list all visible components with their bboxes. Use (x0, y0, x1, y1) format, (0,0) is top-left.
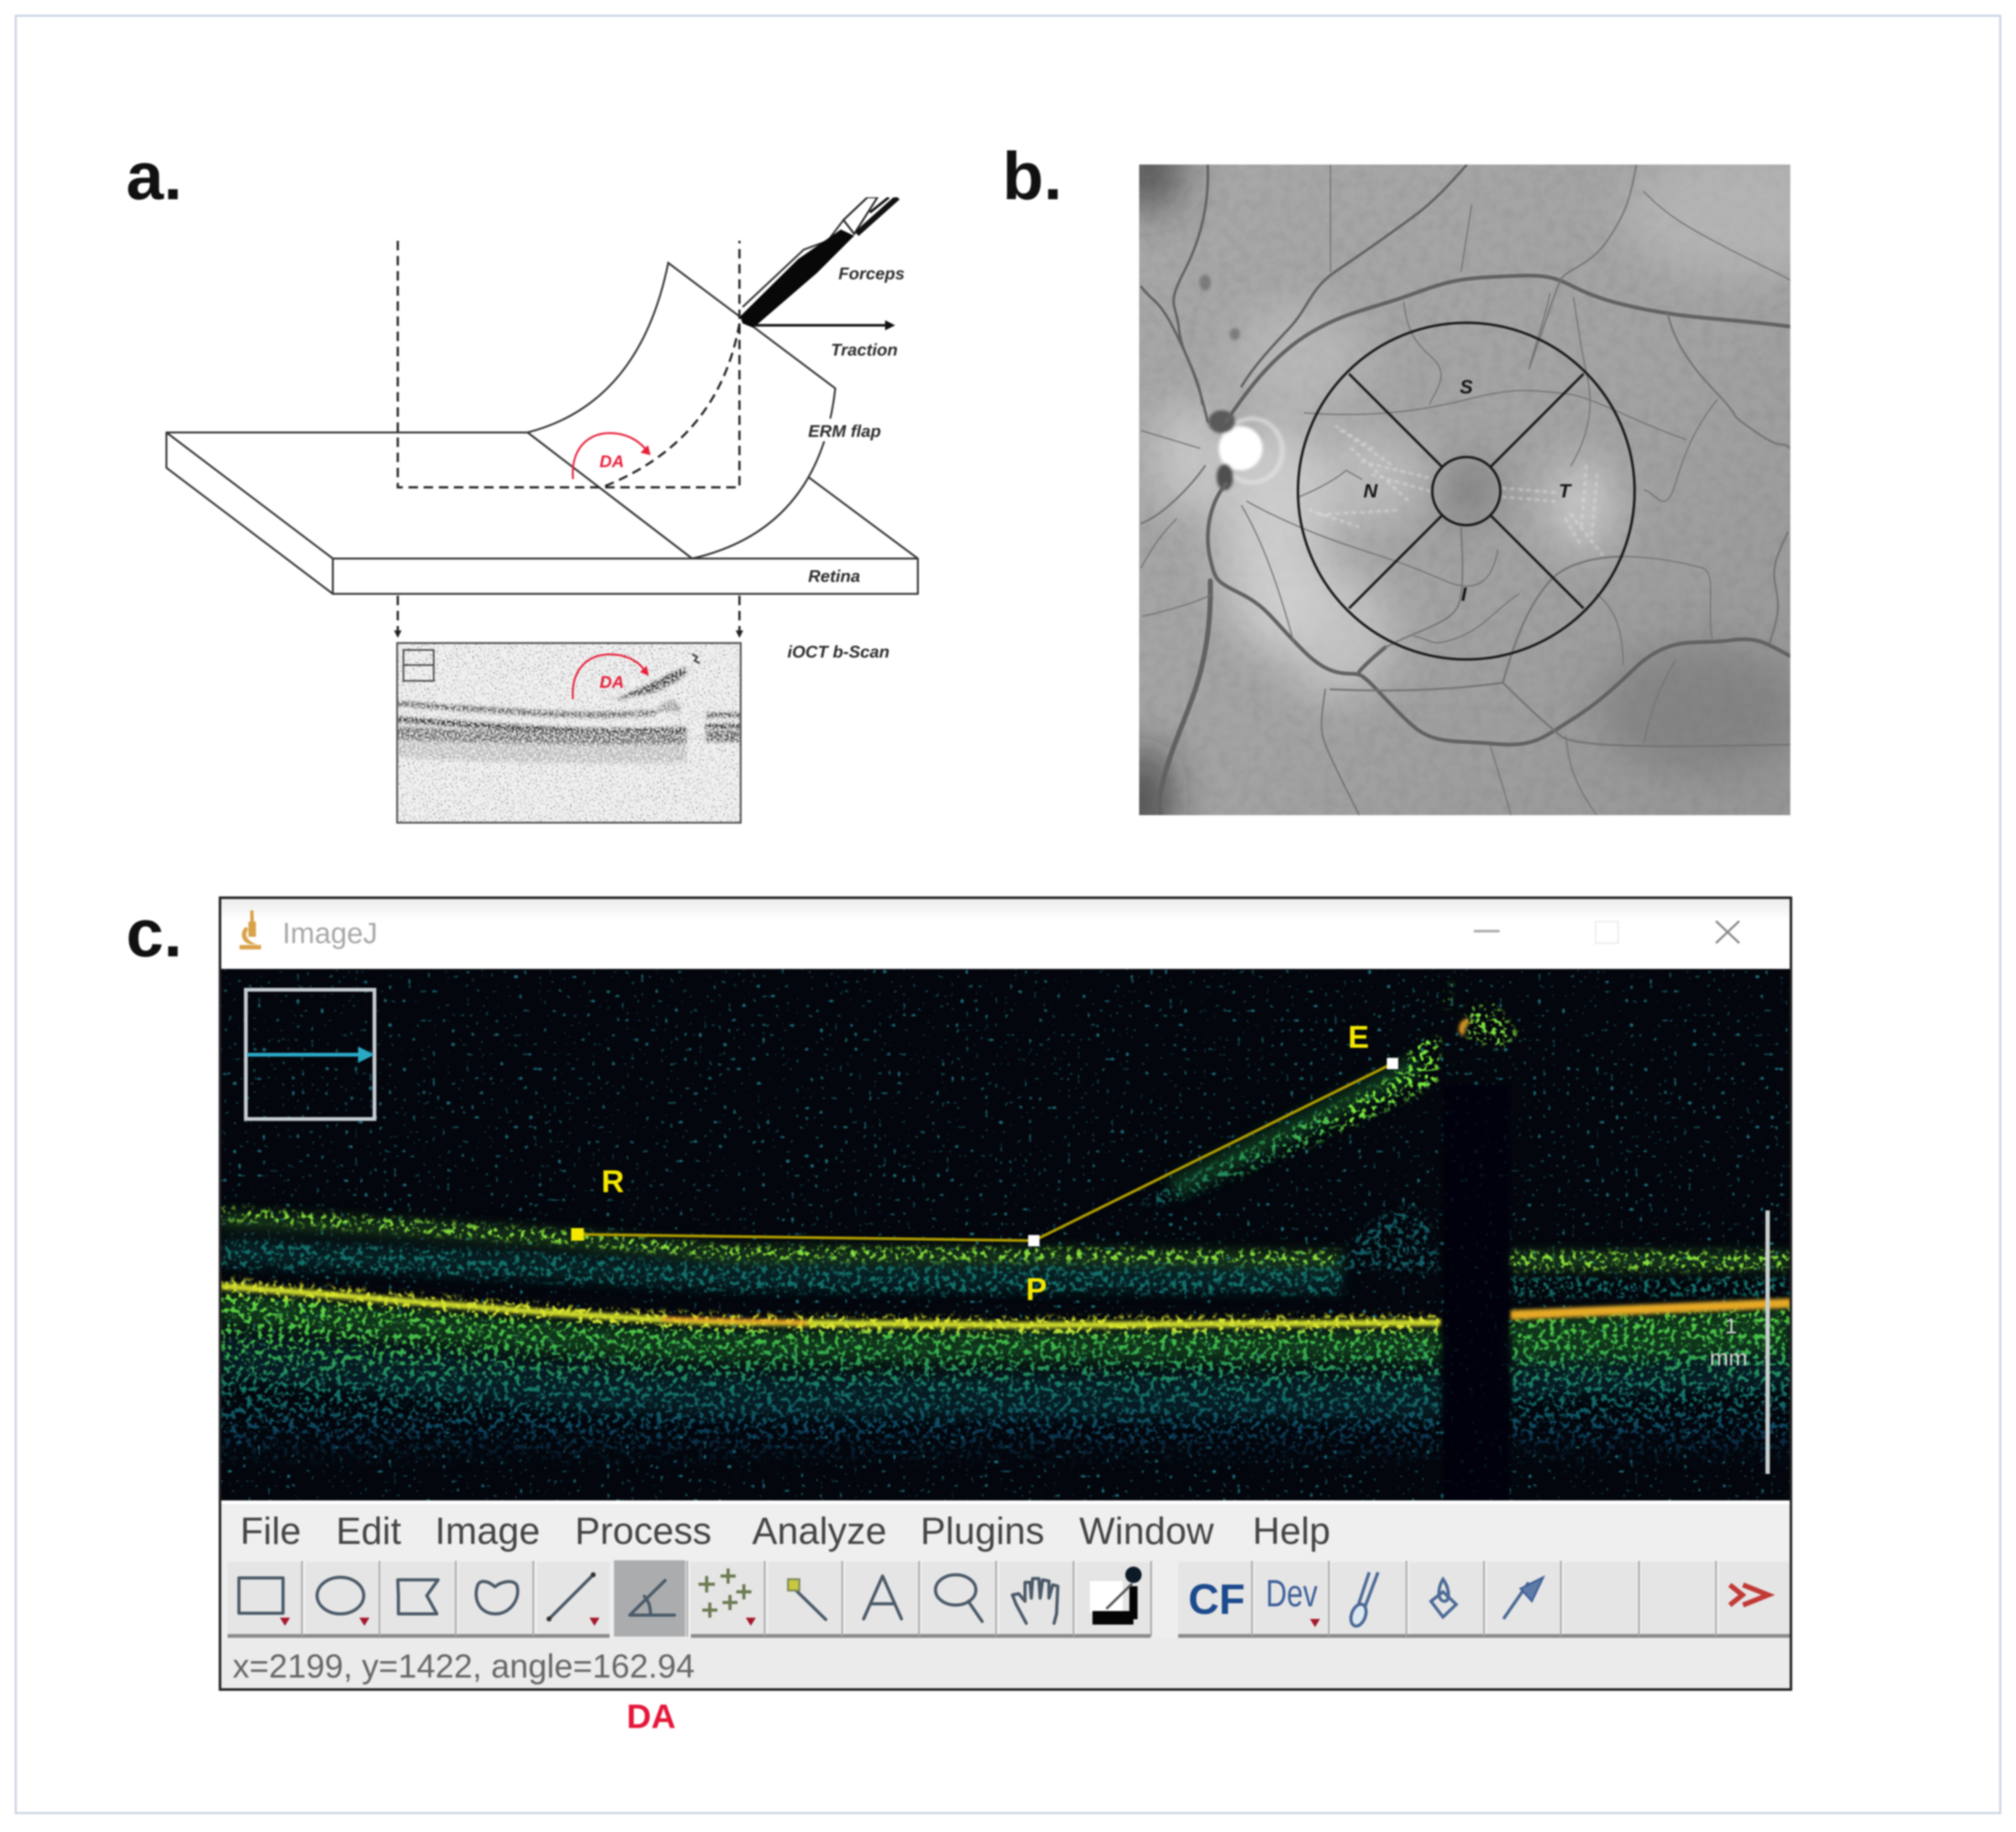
sector labels: I (1461, 583, 1468, 605)
shading (1138, 164, 1790, 816)
icon: freehand tool (476, 1582, 518, 1614)
callout: DA: DA (627, 1698, 676, 1736)
soft band glow (220, 1065, 1791, 1396)
sector labels (1364, 376, 1573, 605)
slab edge redrawn over flap base (692, 557, 918, 560)
icon: Dev tool: Dev (1266, 1572, 1318, 1615)
large vessels (1141, 165, 1790, 818)
iOCT frame (397, 643, 741, 823)
status bar: x=2199, y=1422, angle=162.94 (233, 1648, 695, 1685)
point labels R P E (601, 1019, 1369, 1307)
toolbar buttons (228, 1560, 1790, 1637)
icon: Dev tool (1266, 1572, 1320, 1627)
menu bar: Analyze (752, 1510, 886, 1552)
icon: dropper tool (1090, 1567, 1142, 1621)
small vessels (1141, 165, 1790, 815)
menu bar: Edit (336, 1510, 402, 1552)
RPE bright line (220, 1021, 1791, 1325)
point labels R P E: R (601, 1164, 624, 1199)
OCT scan image (220, 969, 1791, 1500)
ETDRS grid (1298, 323, 1635, 659)
icon: point tool (698, 1568, 756, 1626)
window controls (1474, 921, 1739, 943)
optic disc (1199, 274, 1282, 490)
icon: polygon tool (398, 1580, 438, 1614)
panel label a: a. (126, 138, 182, 214)
label iOCT b-scan: iOCT b-Scan (787, 642, 889, 661)
icon: line tool (547, 1572, 600, 1626)
icon: wand tool (788, 1579, 826, 1620)
panel label b: b. (1002, 138, 1062, 214)
menu bar: Plugins (920, 1510, 1045, 1552)
title bar (221, 899, 1790, 968)
label forceps: Forceps (838, 264, 905, 283)
iOCT b-scan image (397, 643, 741, 823)
label traction: Traction (831, 340, 898, 359)
menu bar: Image (435, 1510, 540, 1552)
window title: ImageJ (282, 917, 378, 949)
menu bar: Help (1253, 1510, 1330, 1552)
menu bar (221, 1500, 1790, 1560)
traction arrow (753, 320, 895, 330)
icon: angle tool selected (630, 1580, 675, 1615)
speckled bands (220, 983, 1791, 1475)
point labels R P E: P (1026, 1272, 1047, 1307)
fundus photograph (1138, 163, 1792, 816)
scale bar 1 mm: 1 (1725, 1314, 1737, 1338)
dissection angle arc (573, 433, 651, 479)
dashed projection lines (398, 241, 739, 630)
icon: more tools chevrons (1730, 1585, 1768, 1605)
scale bar 1 mm (1710, 1210, 1768, 1474)
scale bar 1 mm: mm (1710, 1345, 1747, 1371)
label retina: Retina (808, 567, 860, 586)
icon: bucket tool (1431, 1579, 1456, 1617)
iOCT inset scan locator (403, 650, 434, 681)
angle measurement lines (571, 1058, 1398, 1246)
projection arrowheads (394, 630, 743, 638)
icon: arrow tool (1503, 1577, 1543, 1619)
retina slab (166, 432, 918, 594)
icon: CF tool: CF (1188, 1575, 1245, 1623)
panel a: surgical schematic (126, 138, 918, 823)
icon: oval tool (317, 1577, 369, 1626)
point labels R P E: E (1348, 1019, 1369, 1055)
ERM flap (528, 263, 835, 559)
inset locator with scan arrow (246, 990, 374, 1119)
sector labels: N (1364, 480, 1378, 502)
menu bar: File (240, 1510, 301, 1552)
icon: microscope (240, 910, 261, 949)
shadow of instrument (1444, 1084, 1509, 1500)
icon: brush tool (1348, 1572, 1378, 1628)
panel label c: c. (126, 895, 182, 971)
icon: rectangle tool (239, 1578, 290, 1626)
icon: hand tool (1012, 1579, 1058, 1623)
label ERM flap with mask: ERM flap (808, 422, 881, 441)
toolbar (228, 1560, 1790, 1637)
panel c: ImageJ window (126, 895, 1791, 1736)
iOCT dissection angle arc: DA (600, 673, 624, 692)
panel b: fundus with ETDRS grid (1005, 149, 1792, 816)
dissection angle arc: DA (600, 452, 624, 471)
status bar (221, 1638, 1790, 1688)
iOCT dissection angle arc (573, 654, 649, 699)
icon: text tool (864, 1576, 901, 1619)
icon: magnifier tool (936, 1575, 982, 1621)
sector labels: T (1559, 480, 1573, 502)
exudates (1309, 426, 1602, 554)
forceps (740, 197, 898, 328)
menu bar: Process (575, 1510, 712, 1552)
window body (220, 898, 1791, 1690)
sector labels: S (1460, 376, 1473, 398)
menu bar: Window (1079, 1510, 1214, 1552)
